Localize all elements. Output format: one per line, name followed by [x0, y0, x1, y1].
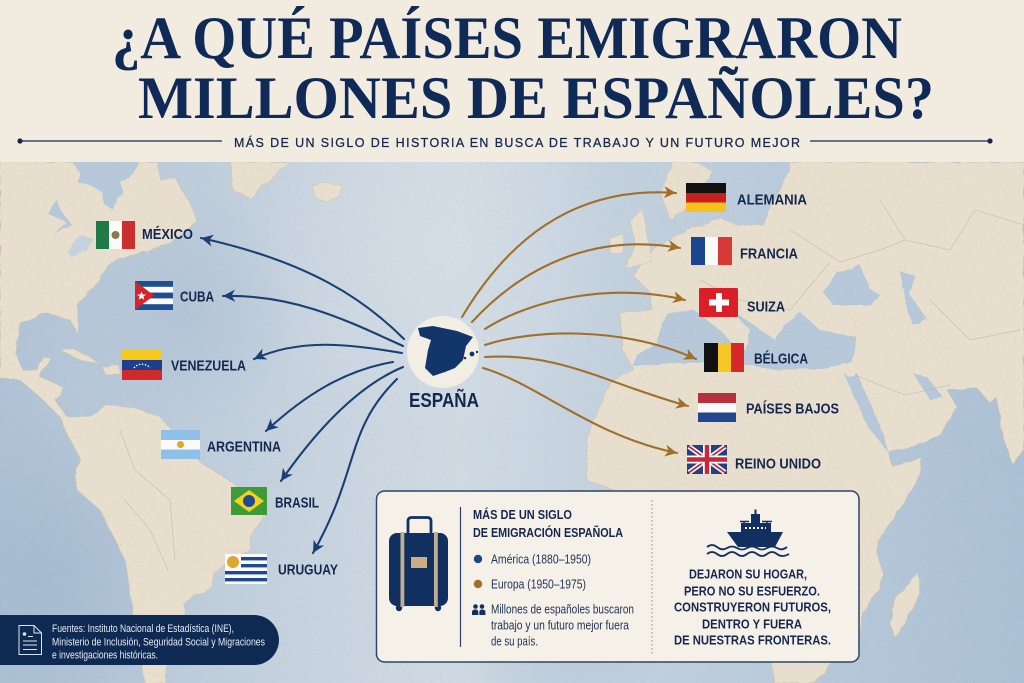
panel heading: MÁS DE UN SIGLO — [473, 507, 572, 522]
Uruguay: URUGUAY — [278, 562, 338, 578]
sources bar — [0, 615, 279, 665]
arrows to Europa — [462, 192, 696, 453]
Bélgica — [704, 343, 808, 372]
closing message — [674, 568, 831, 648]
subtitle with rules: MÁS DE UN SIGLO DE HISTORIA EN BUSCA DE TRABAJO Y UN FUTURO MEJOR — [234, 135, 800, 150]
Uruguay — [225, 554, 338, 584]
Brasil: BRASIL — [275, 494, 319, 512]
arrows to América — [201, 238, 404, 553]
subtitle with rules — [17, 135, 993, 150]
people note: de su país. — [491, 634, 538, 648]
Reino Unido: REINO UNIDO — [735, 456, 821, 472]
Venezuela: VENEZUELA — [171, 358, 246, 374]
Bélgica: BÉLGICA — [754, 350, 808, 368]
Suiza: SUIZA — [747, 298, 785, 316]
closing message: DENTRO Y FUERA — [702, 618, 802, 632]
title: MILLONES DE ESPAÑOLES? — [138, 65, 934, 131]
México — [96, 221, 193, 249]
Argentina: ARGENTINA — [207, 438, 281, 456]
panel heading — [473, 507, 623, 540]
header background — [0, 0, 1024, 162]
Alemania — [686, 183, 807, 212]
Países Bajos: PAÍSES BAJOS — [746, 400, 839, 418]
Cuba: CUBA — [180, 288, 214, 306]
España marker — [407, 316, 479, 412]
Alemania: ALEMANIA — [737, 192, 807, 208]
legend: América: América (1880–1950) — [491, 552, 591, 566]
people note — [472, 602, 634, 648]
info panel — [376, 491, 859, 662]
world map background — [0, 162, 1024, 683]
closing message: DEJARON SU HOGAR, — [689, 568, 807, 582]
Francia: FRANCIA — [740, 246, 798, 262]
sources bar: Fuentes: Instituto Nacional de Estadística (INE), — [52, 623, 234, 635]
icon: document — [19, 626, 42, 654]
people note: trabajo y un futuro mejor fuera — [491, 618, 629, 632]
closing message: CONSTRUYERON FUTUROS, — [674, 600, 831, 614]
México: MÉXICO — [142, 226, 193, 243]
sources bar: e investigaciones históricas. — [52, 650, 158, 662]
title — [112, 5, 934, 131]
panel heading: DE EMIGRACIÓN ESPAÑOLA — [473, 525, 623, 540]
España marker: ESPAÑA — [409, 389, 479, 412]
closing message: DE NUESTRAS FRONTERAS. — [674, 634, 831, 648]
title: ¿A QUÉ PAÍSES EMIGRARON — [112, 5, 902, 71]
Francia — [691, 237, 798, 265]
Suiza — [699, 288, 785, 317]
Brasil — [231, 487, 319, 515]
legend: Europa: Europa (1950–1975) — [491, 578, 586, 592]
closing message: PERO NO SU ESFUERZO. — [684, 584, 820, 598]
icon: ship — [707, 510, 789, 556]
Reino Unido — [687, 445, 821, 474]
icon: suitcase — [389, 518, 448, 611]
Argentina — [161, 430, 281, 459]
Cuba — [135, 281, 214, 310]
people note: Millones de españoles buscaron — [491, 602, 634, 616]
Países Bajos — [698, 393, 839, 422]
Venezuela — [122, 350, 246, 380]
sources bar: Ministerio de Inclusión, Seguridad Social y Migraciones — [52, 636, 265, 648]
